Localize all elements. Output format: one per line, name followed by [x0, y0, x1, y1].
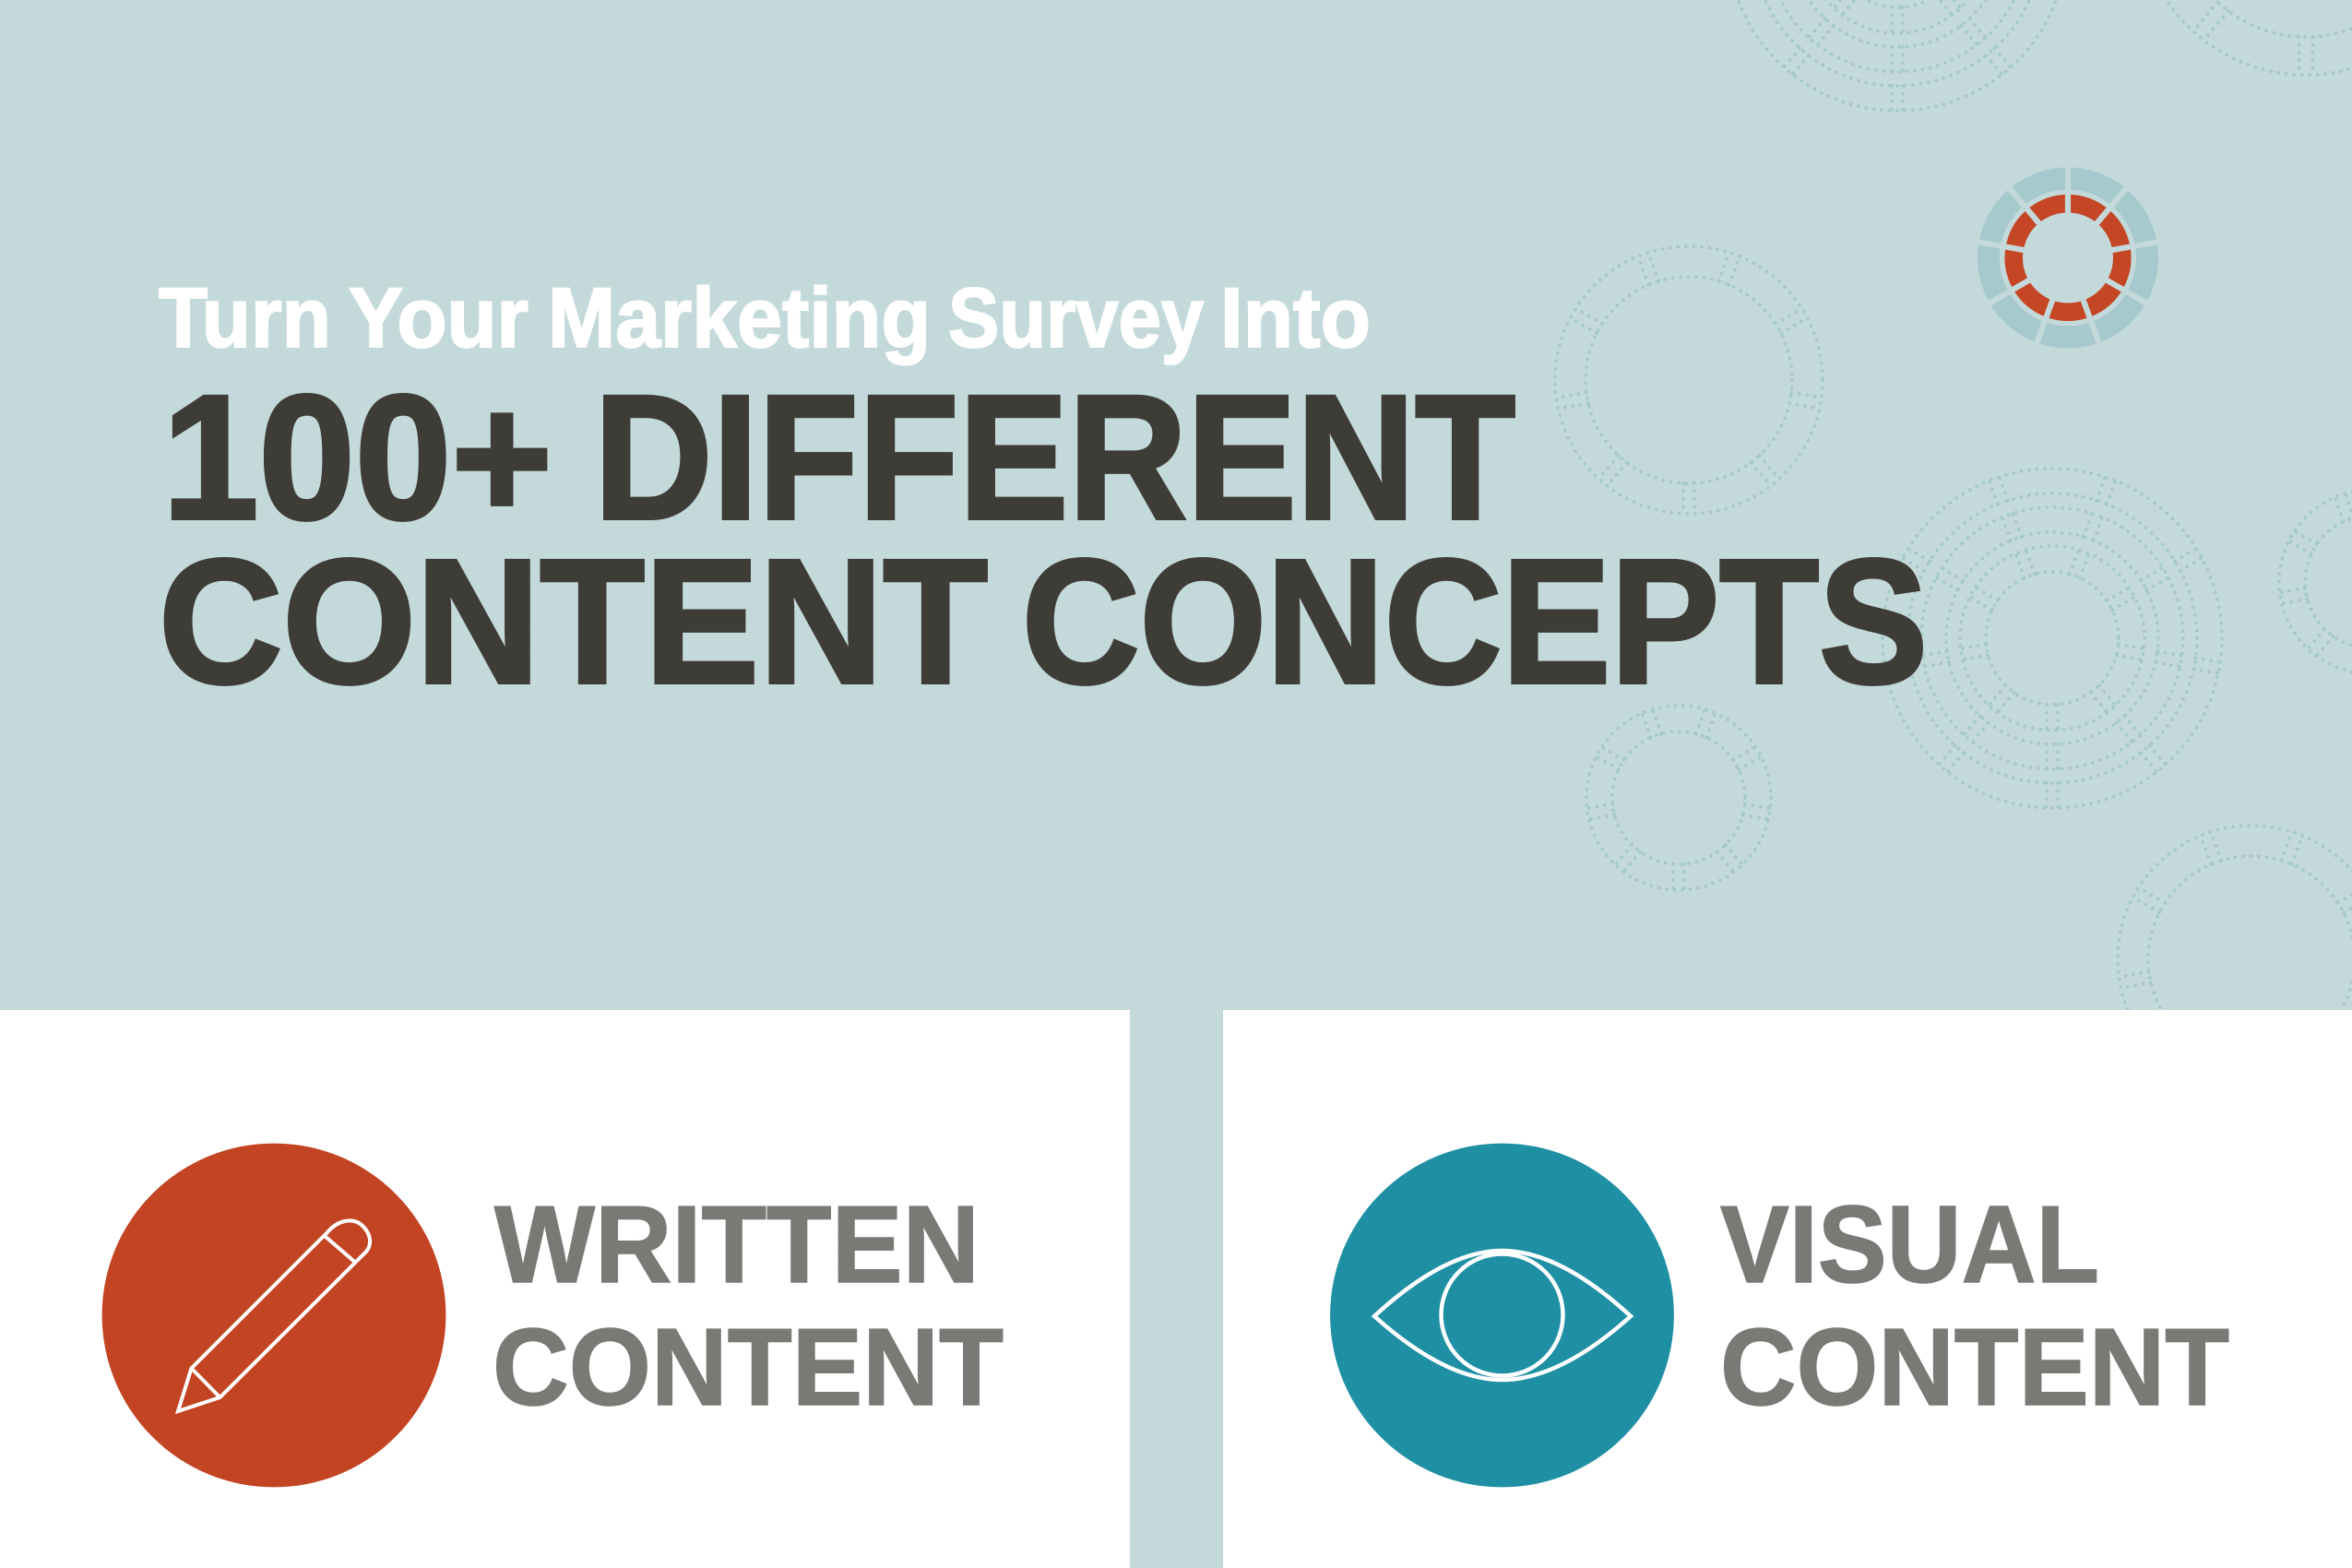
written content label: CONTENT [493, 1306, 1004, 1429]
visual content label: CONTENT [1720, 1306, 2229, 1429]
subtitle: Your [349, 271, 529, 365]
subtitle: Marketing [548, 271, 931, 365]
written content label: WRITTEN [494, 1183, 980, 1306]
subtitle: Into [1220, 271, 1371, 365]
icon: pencil in red circle [102, 1144, 445, 1487]
icon: eye in teal circle [1330, 1144, 1674, 1487]
visual content label [1720, 1183, 2229, 1429]
title: 100+ [162, 358, 552, 556]
subtitle: Survey [948, 271, 1204, 365]
subtitle [159, 271, 1371, 365]
title: CONCEPTS [1022, 522, 1928, 720]
panel: written content [0, 1010, 1130, 1568]
title: DIFFERENT [594, 358, 1515, 556]
panel: visual content [1223, 1010, 2352, 1568]
icon: segmented circle logo [1974, 163, 2162, 348]
written content label [493, 1183, 1004, 1429]
title [159, 358, 1928, 720]
visual content label: VISUAL [1720, 1183, 2099, 1306]
subtitle: Turn [159, 271, 331, 365]
decorative dotted rings [1555, 0, 2352, 1093]
title: CONTENT [159, 522, 988, 720]
